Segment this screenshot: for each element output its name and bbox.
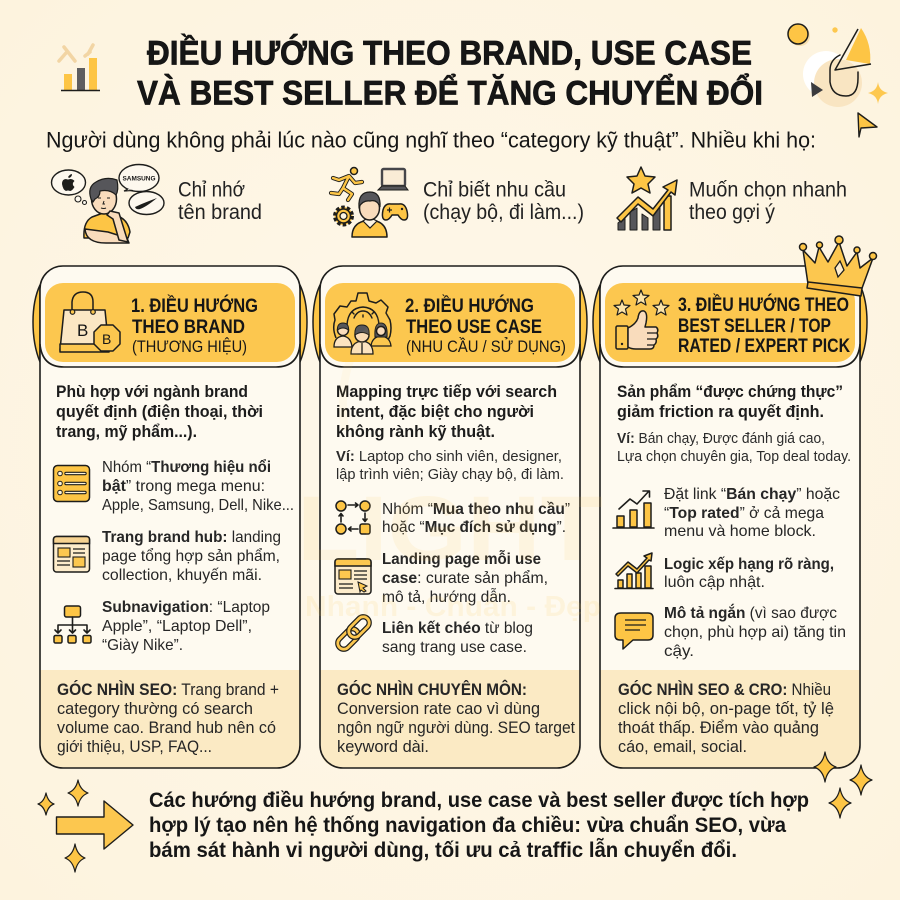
card 3 icon: rising chart bbox=[615, 553, 653, 588]
sparkles lower right bbox=[814, 752, 872, 818]
card 3 heading: RATED / EXPERT PICK bbox=[678, 336, 850, 357]
icon: top-right decorative shapes bbox=[788, 24, 888, 137]
card 1 item: brand hub bbox=[102, 529, 281, 584]
card 3 SEO and CRO note: thoát thấp. Điểm vào quảng bbox=[618, 719, 819, 737]
card 3 icon: bar chart with trend bbox=[613, 491, 654, 528]
card 2 item: shop by need: Nhóm “Mua theo nhu cầu” bbox=[382, 501, 570, 518]
card 1 header icon: shopping bag bbox=[60, 292, 120, 352]
card 2 example bbox=[336, 449, 564, 483]
card 2 item: cross links: Liên kết chéo từ blog bbox=[382, 620, 533, 637]
card 1 item: featured brands bbox=[102, 458, 294, 514]
title: ĐIỀU HƯỚNG THEO BRAND, USE CASE bbox=[147, 34, 752, 72]
card 1 SEO note: volume cao. Brand hub nên có bbox=[57, 719, 276, 737]
card 1 item: brand hub: page tổng hợp sản phẩm, bbox=[102, 547, 280, 565]
card 3 SEO and CRO note: GÓC NHÌN SEO & CRO: Nhiều bbox=[618, 680, 831, 699]
need 1: remembers brand bbox=[52, 164, 245, 243]
panel: card 1 brand bbox=[33, 266, 307, 768]
icon: top-left bar chart bbox=[59, 45, 100, 90]
card 3 item: ranking logic: Logic xếp hạng rõ ràng, bbox=[664, 556, 834, 573]
card 3 item: ranking logic bbox=[664, 556, 834, 591]
label: Chỉ biết nhu cầu bbox=[423, 178, 566, 202]
card 1 heading: (THƯƠNG HIỆU) bbox=[132, 337, 247, 356]
icon: thinking person with brand bubbles: SAMSUNG bbox=[122, 176, 156, 182]
card 2 example: lập trình viên; Giày chạy bộ, đi làm. bbox=[336, 467, 564, 483]
card 3 description bbox=[617, 382, 843, 421]
panel: card 2 use case bbox=[313, 266, 587, 768]
card 1 icon: list bbox=[54, 466, 90, 502]
card 1 icon: sitemap bbox=[54, 606, 91, 643]
label: brand name: tên brand bbox=[178, 201, 262, 224]
card 3 example: Lựa chọn chuyên gia, Top deal today. bbox=[617, 449, 851, 465]
card 1 SEO note bbox=[57, 680, 279, 756]
card 3 heading: 3. ĐIỀU HƯỚNG THEO bbox=[678, 294, 849, 316]
card 2 item: shop by need: hoặc “Mục đích sử dụng”. bbox=[382, 519, 566, 536]
card 1 description: quyết định (điện thoại, thời bbox=[56, 402, 263, 421]
card 2 expert note: keyword dài. bbox=[337, 738, 429, 756]
card 2 expert note: Conversion rate cao vì dùng bbox=[337, 700, 540, 718]
card 2 icon: flow cycle bbox=[336, 501, 370, 534]
label: suggestion: theo gợi ý bbox=[689, 201, 775, 224]
card 2 item: cross links: sang trang use case. bbox=[382, 639, 527, 656]
card 2 item: cross links bbox=[382, 620, 533, 656]
card 1 description bbox=[56, 382, 263, 441]
watermark: Nhanh - Chuẩn - Đẹp bbox=[305, 591, 601, 623]
card 3 example: Ví: Bán chạy, Được đánh giá cao, bbox=[617, 431, 825, 447]
conclusion text: hợp lý tạo nên hệ thống navigation đa chiều: vừa chuẩn SEO, vừa bbox=[149, 813, 787, 837]
card 3 item: short description: Mô tả ngắn (vì sao được bbox=[664, 603, 837, 622]
card 2 expert note bbox=[337, 680, 575, 756]
card 2 description: intent, đặc biệt cho người bbox=[336, 402, 534, 421]
card 1 SEO note: GÓC NHÌN SEO: Trang brand + bbox=[57, 680, 279, 699]
title bbox=[137, 34, 763, 112]
card 2 expert note: GÓC NHÌN CHUYÊN MÔN: bbox=[337, 680, 527, 699]
card 1 header icon: shopping bag: B bbox=[102, 331, 111, 347]
card 2 heading: THEO USE CASE bbox=[406, 317, 542, 338]
card 1 description: trang, mỹ phẩm...). bbox=[56, 422, 197, 441]
card 1 header icon: shopping bag: B bbox=[77, 321, 88, 340]
label: need example: (chạy bộ, đi làm...) bbox=[423, 201, 584, 224]
card 2 description bbox=[336, 382, 557, 441]
card 3 item: best seller link bbox=[664, 486, 840, 540]
card 1 heading bbox=[131, 295, 258, 356]
card 1 item: subnavigation: Subnavigation: “Laptop bbox=[102, 599, 270, 616]
card 3 item: ranking logic: luôn cập nhật. bbox=[664, 574, 765, 591]
card 2 description: không rành kỹ thuật. bbox=[336, 422, 495, 441]
card 2 heading bbox=[405, 295, 566, 356]
icon: star above growth chart bbox=[617, 167, 677, 230]
watermark: LIGHT bbox=[297, 478, 603, 580]
card 1 item: featured brands: Apple, Samsung, Dell, Nike... bbox=[102, 497, 294, 514]
card 1 item: brand hub: collection, khuyến mãi. bbox=[102, 567, 262, 584]
card 2 item: landing page: mô tả, hướng dẫn. bbox=[382, 587, 511, 606]
card 3 item: best seller link: “Top rated” ở cả mega bbox=[664, 505, 824, 522]
icon: thinking person with brand bubbles bbox=[52, 164, 164, 243]
card 2 icon: chain link bbox=[335, 614, 372, 652]
card 3 SEO and CRO note: cáo, email, social. bbox=[618, 738, 747, 756]
card 2 item: landing page bbox=[382, 549, 548, 606]
card 2 example: Ví: Laptop cho sinh viên, designer, bbox=[336, 449, 562, 465]
card 2 header icon: gear with people bbox=[334, 293, 391, 354]
card 1 item: subnavigation: Apple”, “Laptop Dell”, bbox=[102, 618, 252, 635]
card 3 item: short description: cậy. bbox=[664, 643, 694, 660]
card 1 SEO note: giới thiệu, USP, FAQ... bbox=[57, 738, 212, 756]
conclusion text: Các hướng điều hướng brand, use case và best seller được tích hợp bbox=[149, 788, 809, 812]
card 3 heading: BEST SELLER / TOP bbox=[678, 316, 831, 337]
card 3 item: best seller link: Đặt link “Bán chạy” hoặc bbox=[664, 486, 840, 503]
card 2 heading: (NHU CẦU / SỬ DỤNG) bbox=[406, 337, 566, 356]
icon: person with activity icons bbox=[331, 168, 408, 237]
icon: crown bbox=[800, 236, 876, 296]
card 3 icon: speech bubble bbox=[615, 613, 653, 649]
intro sentence: Người dùng không phải lúc nào cũng nghĩ theo “category kỹ thuật”. Nhiều khi họ: bbox=[46, 128, 816, 152]
card 1 icon: web page bbox=[54, 536, 90, 572]
card 1 heading: THEO BRAND bbox=[132, 317, 245, 338]
conclusion text bbox=[149, 788, 809, 862]
need 3: wants a quick pick bbox=[617, 167, 847, 230]
card 3 description: giảm friction ra quyết định. bbox=[617, 402, 824, 421]
card 3 description: Sản phẩm “được chứng thực” bbox=[617, 382, 843, 401]
card 2 item: landing page: case: curate sản phẩm, bbox=[382, 569, 548, 587]
label: Muốn chọn nhanh bbox=[689, 178, 847, 202]
card 2 item: shop by need bbox=[382, 501, 570, 536]
card 2 icon: landing page bbox=[335, 559, 371, 594]
label: Chỉ nhớ bbox=[178, 178, 245, 202]
need 2: knows the need bbox=[331, 168, 566, 237]
card 3 item: best seller link: menu và home block. bbox=[664, 523, 816, 540]
card 3 SEO and CRO note: click nội bộ, on-page tốt, tỷ lệ bbox=[618, 700, 834, 718]
watermark bbox=[297, 294, 603, 623]
conclusion text: bám sát hành vi người dùng, tối ưu cả traffic lẫn chuyển đổi. bbox=[149, 837, 737, 862]
card 3 SEO and CRO note bbox=[618, 680, 834, 756]
panel: card 3 best seller bbox=[593, 266, 867, 768]
card 1 description: Phù hợp với ngành brand bbox=[56, 382, 248, 401]
title: VÀ BEST SELLER ĐỂ TĂNG CHUYỂN ĐỔI bbox=[137, 74, 763, 112]
card 3 item: short description: chọn, phù hợp ai) tăng tin bbox=[664, 624, 846, 641]
card 2 description: Mapping trực tiếp với search bbox=[336, 382, 557, 401]
card 1 item: featured brands: bật” trong mega menu: bbox=[102, 478, 265, 495]
card 3 heading bbox=[678, 294, 850, 357]
card 1 item: brand hub: Trang brand hub: landing bbox=[102, 529, 281, 546]
sparkles lower left bbox=[38, 780, 88, 872]
card 3 header icon: thumbs up with stars bbox=[614, 290, 669, 349]
card 3 example bbox=[617, 431, 851, 465]
card 2 heading: 2. ĐIỀU HƯỚNG bbox=[405, 295, 534, 317]
card 1 item: featured brands: Nhóm “Thương hiệu nổi bbox=[102, 458, 271, 476]
card 1 item: subnavigation bbox=[102, 599, 270, 654]
card 3 item: short description bbox=[664, 603, 846, 660]
card 2 item: landing page: Landing page mỗi use bbox=[382, 549, 541, 568]
card 1 item: subnavigation: “Giày Nike”. bbox=[102, 637, 183, 654]
card 1 heading: 1. ĐIỀU HƯỚNG bbox=[131, 295, 258, 317]
card 2 expert note: ngôn ngữ người dùng. SEO target bbox=[337, 719, 575, 737]
arrow bbox=[56, 801, 133, 849]
card 1 SEO note: category thường có search bbox=[57, 700, 253, 718]
